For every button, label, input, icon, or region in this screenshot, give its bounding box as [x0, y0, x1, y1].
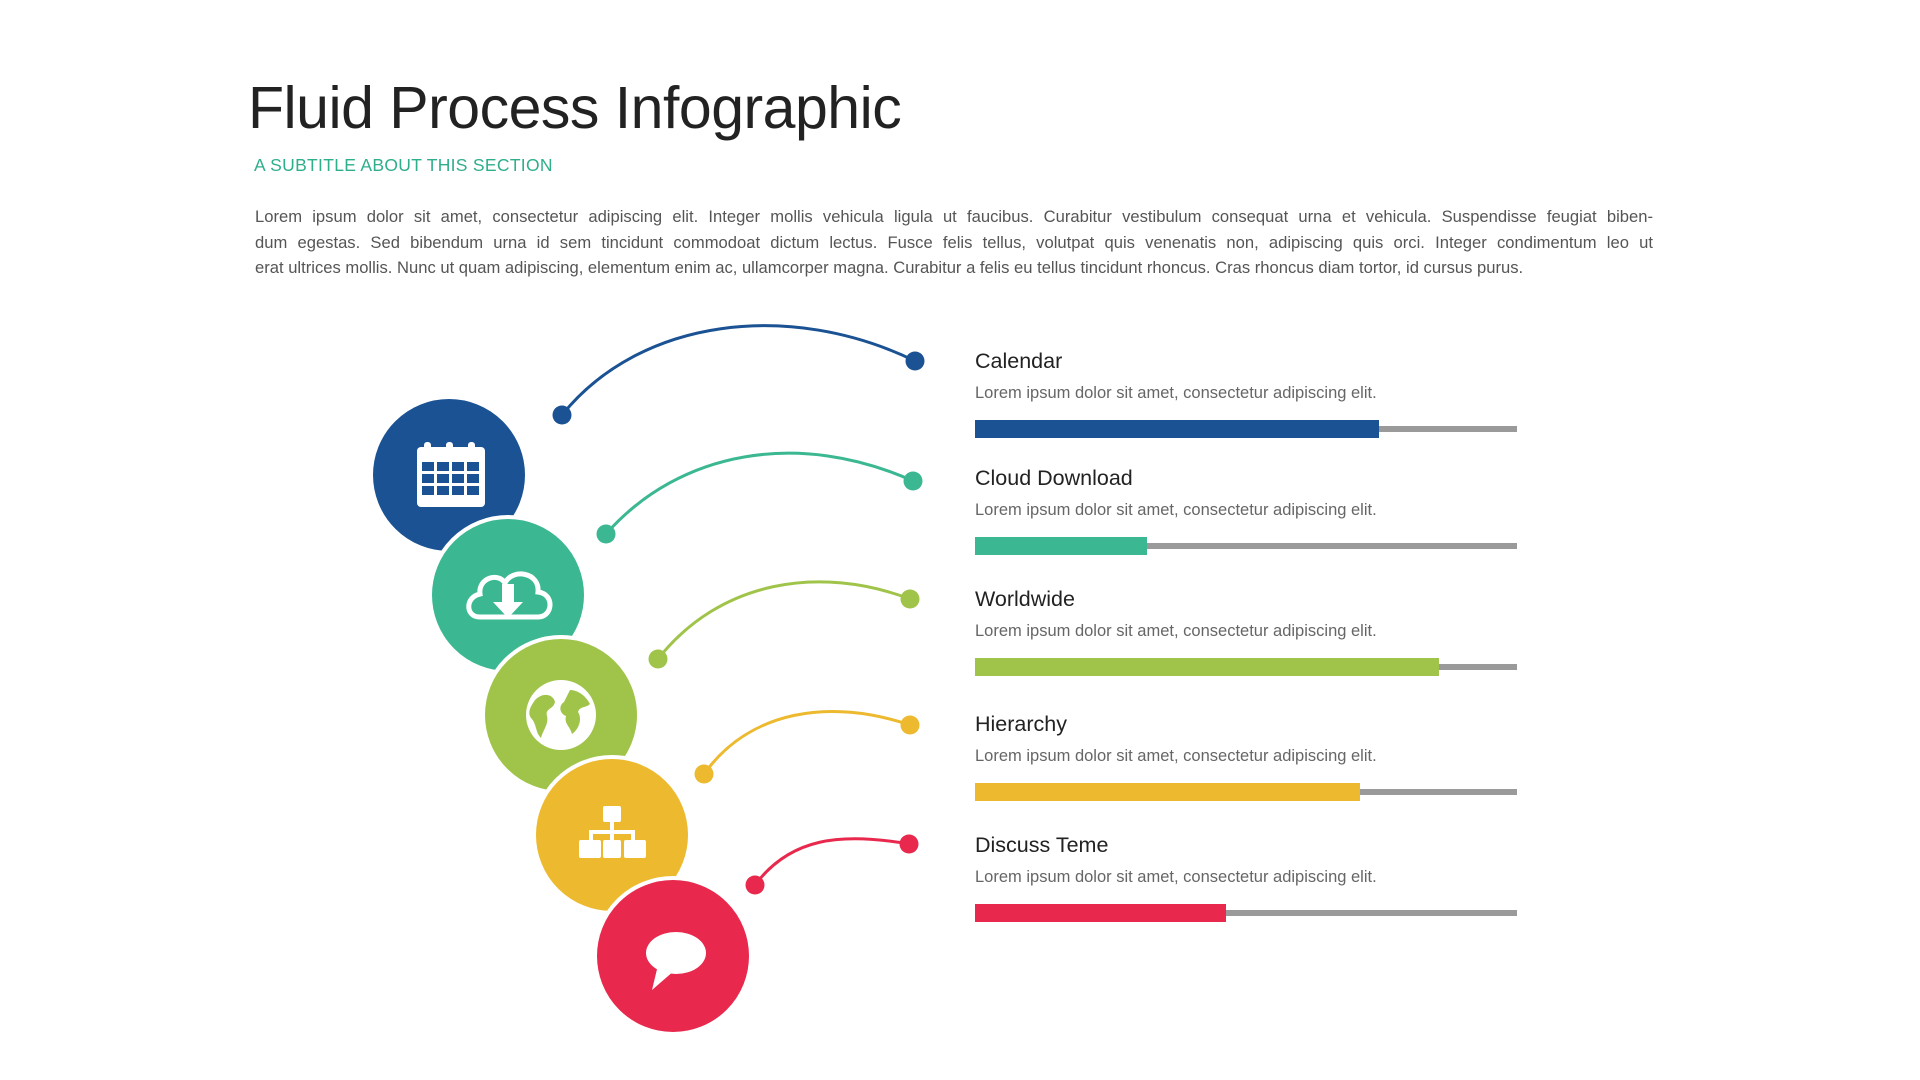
- circle: cloud: [430, 517, 586, 673]
- item: calendar: Calendar: [975, 349, 1062, 373]
- intro paragraph: Lorem ipsum dolor sit amet, consectetur adipiscing elit. Integer mollis vehicula ligula ut faucibus. Curabitur vestibulum consequat urna et vehicula. Suspendisse feugiat biben-: [255, 207, 1653, 226]
- arc: calendar: [552, 326, 924, 424]
- item: worldwide: Lorem ipsum dolor sit amet, consectetur adipiscing elit.: [975, 622, 1377, 640]
- arc: hierarchy: [694, 711, 920, 784]
- intro paragraph: [255, 207, 1653, 277]
- item: hierarchy: Hierarchy: [975, 712, 1067, 736]
- circle: calendar: [371, 397, 527, 553]
- item: calendar: Lorem ipsum dolor sit amet, consectetur adipiscing elit.: [975, 384, 1377, 402]
- item: cloud download: Cloud Download: [975, 466, 1133, 490]
- arc: discuss: [746, 834, 918, 894]
- icon: cloud download: [469, 574, 550, 618]
- item: discuss teme: [975, 833, 1517, 922]
- item: hierarchy: [975, 712, 1517, 801]
- arc: globe: [648, 582, 920, 668]
- icon: calendar: [417, 442, 485, 507]
- item: calendar: [975, 349, 1517, 438]
- item: cloud download: [975, 466, 1517, 555]
- item: cloud download: Lorem ipsum dolor sit amet, consectetur adipiscing elit.: [975, 501, 1377, 519]
- item: worldwide: [975, 587, 1517, 676]
- subtitle: A SUBTITLE ABOUT THIS SECTION: [254, 155, 553, 175]
- icon: hierarchy: [579, 806, 646, 858]
- circle: discuss: [595, 878, 751, 1034]
- item: discuss teme: Lorem ipsum dolor sit amet, consectetur adipiscing elit.: [975, 868, 1377, 886]
- title: Fluid Process Infographic: [248, 75, 901, 141]
- circle: hierarchy: [534, 757, 690, 913]
- intro paragraph: erat ultrices mollis. Nunc ut quam adipiscing, elementum enim ac, ullamcorper magna. Curabitur a felis eu tellus tincidunt rhoncus. Cras rhoncus diam tortor, id cursus purus.: [255, 258, 1523, 277]
- item: worldwide: Worldwide: [975, 587, 1075, 611]
- icon: globe: [526, 680, 596, 750]
- icon: speech bubble: [646, 932, 706, 990]
- circle: globe: [483, 637, 639, 793]
- intro paragraph: dum egestas. Sed bibendum urna id sem tincidunt commodoat dictum lectus. Fusce felis tellus, volutpat quis venenatis non, adipiscing quis orci. Integer condimentum leo ut: [255, 233, 1653, 252]
- item: hierarchy: Lorem ipsum dolor sit amet, consectetur adipiscing elit.: [975, 747, 1377, 765]
- item: discuss teme: Discuss Teme: [975, 833, 1108, 857]
- arc: cloud: [596, 453, 922, 544]
